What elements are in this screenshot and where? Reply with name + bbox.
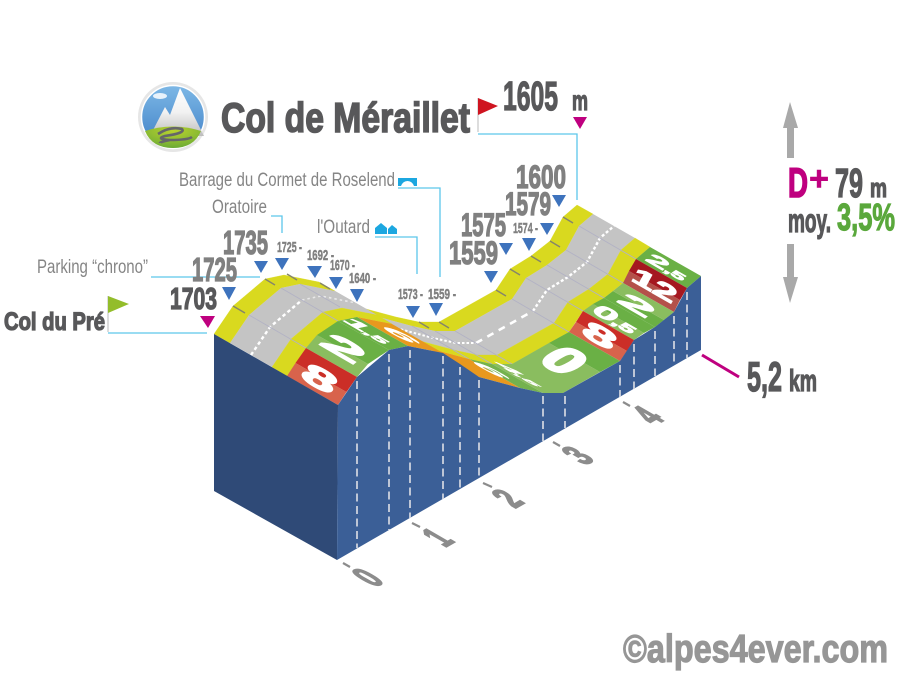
altitude marks: small: 1574 - [513,220,538,237]
title: Col de Méraillet [221,94,470,141]
underlay of the hidden descent [319,282,479,377]
distance axis labels: 1 [413,523,464,553]
place label: l'Outard: l'Outard [317,217,370,238]
gradient band: 12: 12 [628,263,681,309]
place label: Oratoire: Oratoire [212,197,267,218]
road surface: tarmac with centre line [230,214,635,367]
gradient band: 0: 0 [527,339,601,382]
distance axis labels: 0 [343,563,394,593]
start: Col du Pré [4,281,217,336]
gradient band: orange right [428,348,521,388]
stat: climb and average gradient: m [870,173,887,203]
road surface: front verge [272,238,650,376]
kilometre station lines on road [249,226,636,364]
gradient band: orange left: 6 [372,324,431,347]
altitude marks: large: 1575 [461,207,506,243]
gradient band: 4,5: 4,5 [488,360,551,389]
place label: Barrage du Cormet de Roselend [179,170,440,277]
gradient band: 1,5: 1,5 [337,317,397,345]
gradient band: 2,5: 2,5 [642,251,692,284]
kilometre dashes on wall [357,292,687,548]
summit altitude: m [572,85,588,116]
total distance [702,353,817,400]
gradient band: 2 [604,283,674,327]
gradient band: 0,5: 0,5 [586,302,646,337]
altitude marks: small: 1670 - [330,257,355,274]
gradient band: 8 right [569,311,634,361]
gradient band: orange right: 6 [462,358,521,383]
altitude marks: small [275,220,538,318]
distance axis labels: 2 [483,484,534,514]
place label: Oratoire [212,197,282,233]
gradient band: 8 left [287,348,357,405]
place label: l'Outard [317,217,417,274]
altitude marks: small: 1573 - [398,286,423,303]
stat: climb and average gradient: + [809,160,829,198]
gradient band: 8 left: 8 [295,357,344,400]
gradient band: 2 left: 2 [313,328,374,369]
altitude marks: large: 1600 [516,159,566,195]
left end face [214,334,338,560]
altitude marks: small: 1640 - [349,270,376,287]
gradient band: orange left [357,317,443,353]
gradient band: 4,5 [469,359,551,393]
altitude marks: large: 1725 [192,251,237,288]
kilometre ticks on back verge [233,217,573,328]
summit altitude: 1605 [503,73,558,119]
altitude marks: small: 1559 - [428,286,456,303]
altitude marks: small: 1725 - [277,239,302,256]
gradient band: 0,5 [583,298,655,340]
gradient band: 2: 2 [612,289,661,322]
stat: climb and average gradient: D [788,159,808,206]
start: Col du Pré: Col du Pré [4,308,105,336]
place label: Barrage du Cormet de Roselend: Barrage du Cormet de Roselend [179,170,395,191]
gradient band: 2 left [306,321,389,377]
altitude marks: large: 1579 [505,186,551,222]
summit marker and leader [478,117,587,200]
icon: mountain logo [138,82,208,152]
stat: climb and average gradient: 79 [835,160,863,206]
distance axis labels [343,401,674,593]
profile wall [337,276,701,560]
place label: Parking chrono: Parking “chrono” [37,257,148,278]
gradient band: 8 right: 8 [577,316,622,356]
altitude marks: large: 1735 [223,224,268,261]
gradient band: 1,5 [337,317,408,350]
start: Col du Pré: 1703 [170,281,217,316]
summit flag [478,98,498,132]
altitude marks: large: 1559 [449,235,498,271]
gradient band: 0 [492,332,620,393]
stat: climb and average gradient: moy. [788,202,831,239]
distance axis labels: 3 [553,441,604,471]
altitude marks: small: 1692 - [307,247,334,264]
gradient band: 2,5 [636,247,701,288]
road surface: back verge [214,205,593,343]
total distance: km [789,363,817,398]
distance axis labels: 4 [623,401,674,431]
total distance: 5,2 [747,353,782,400]
stat: climb and average gradient [783,102,895,303]
altitude marks: large [192,159,566,300]
